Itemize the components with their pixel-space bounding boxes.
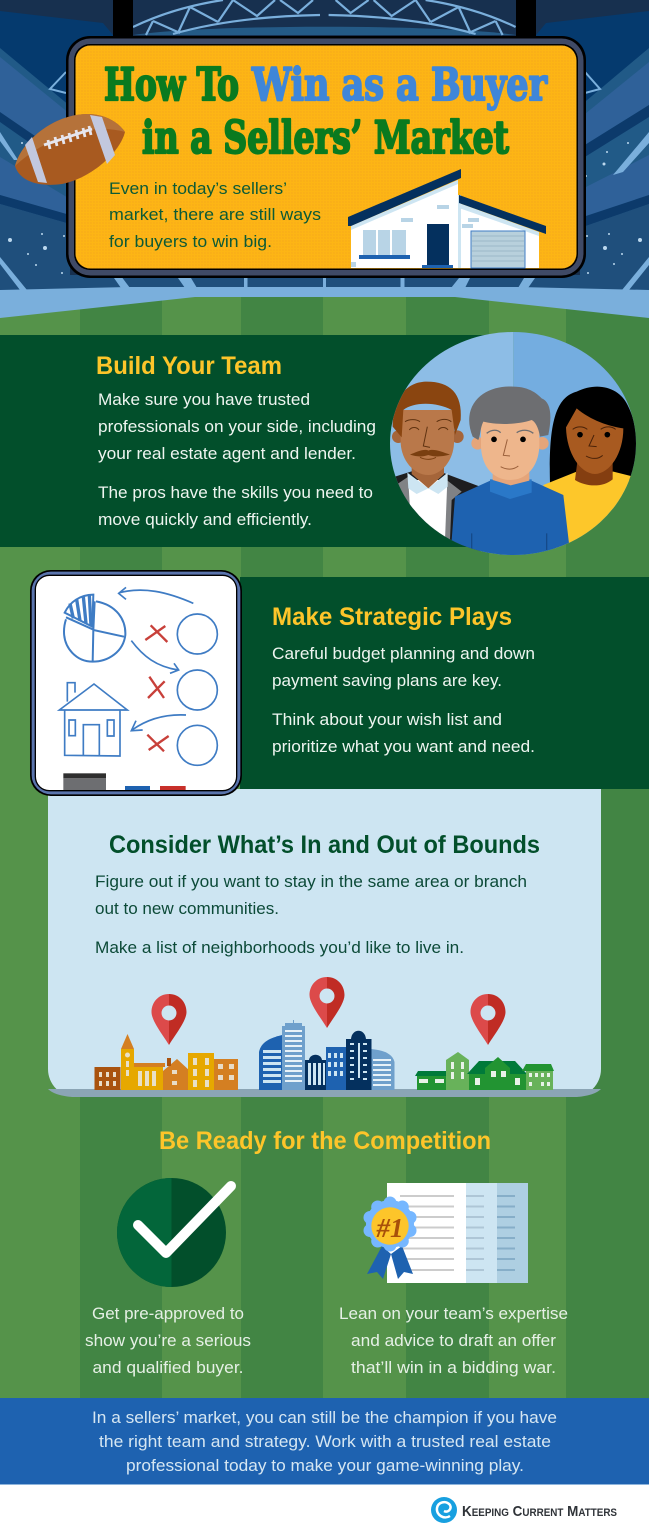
text: build your team: your real estate agent and lender. — [98, 444, 356, 463]
heading: be ready for the competition: Be Ready for the Competition — [159, 1127, 491, 1155]
text: make strategic plays: prioritize what you want and need. — [272, 737, 535, 756]
text: consider — [95, 872, 527, 957]
icon: map pin center — [310, 977, 344, 1028]
text: make strategic plays: payment saving plans are key. — [272, 671, 502, 690]
icon: house — [348, 169, 546, 268]
logo: swirl — [431, 1497, 457, 1523]
eraser and markers — [63, 773, 186, 790]
banner: closing message: the right team and strategy. Work with a trusted real estate — [99, 1432, 551, 1451]
heading: build your team: Build Your Team — [96, 352, 282, 380]
text: pre-approved — [85, 1304, 251, 1377]
illustration: team portraits — [383, 327, 640, 560]
title: in a Sellers’ Market — [142, 111, 509, 164]
icon: document with ribbon — [364, 1183, 528, 1283]
banner: closing message: In a sellers’ market, you can still be the champion if you have — [92, 1408, 557, 1427]
text: make strategic plays — [272, 644, 535, 756]
x marks — [145, 625, 169, 751]
text: build your team: Make sure you have trusted — [98, 390, 310, 409]
stars — [8, 142, 642, 274]
intro text: market, there are still ways — [109, 205, 321, 224]
text: pre-approved: show you’re a serious — [85, 1331, 251, 1350]
heading: make strategic plays: Make Strategic Plays — [272, 603, 512, 631]
person: woman — [543, 387, 636, 560]
text: build your team — [98, 390, 376, 529]
banner: closing message — [0, 1398, 649, 1485]
banner: closing message: professional today to make your game-winning play. — [126, 1456, 524, 1475]
pie chart sketch — [64, 595, 125, 662]
truss arches — [133, 0, 516, 35]
person: man with moustache — [392, 382, 480, 560]
illustration: suburb — [415, 1052, 554, 1090]
panel: consider in and out of bounds — [48, 789, 601, 1097]
text: make strategic plays: Careful budget planning and down — [272, 644, 535, 663]
intro text: Even in today’s sellers’ — [109, 179, 287, 198]
text: make strategic plays: Think about your wish list and — [272, 710, 502, 729]
text: consider: Make a list of neighborhoods you’d like to live in. — [95, 938, 464, 957]
play arrows — [119, 587, 193, 731]
person: gray-haired man — [450, 386, 573, 560]
stadium backdrop — [0, 0, 649, 292]
house sketch — [59, 683, 127, 756]
text: consider: out to new communities. — [95, 899, 279, 918]
text: draft an offer: and advice to draft an offer — [351, 1331, 556, 1350]
field edge: light blue wall — [0, 287, 649, 318]
text: draft an offer: Lean on your team’s expertise — [339, 1304, 568, 1323]
icon: check mark — [117, 1178, 231, 1287]
icon: map pin left — [152, 994, 186, 1045]
icon: football — [15, 114, 125, 185]
whiteboard — [30, 570, 242, 796]
text: draft an offer — [339, 1304, 568, 1377]
under-sign bar — [60, 275, 590, 289]
right stands — [536, 11, 649, 292]
text: consider: Figure out if you want to stay in the same area or branch — [95, 872, 527, 891]
text: build your team: professionals on your side, including — [98, 417, 376, 436]
circles — [177, 614, 217, 765]
icon: map pin right — [470, 994, 506, 1045]
text: build your team: move quickly and efficiently. — [98, 510, 312, 529]
intro text: for buyers to win big. — [109, 232, 272, 251]
intro text — [109, 179, 321, 251]
title: How To — [104, 58, 239, 111]
panel: make strategic plays — [240, 577, 649, 789]
text: draft an offer: that’ll win in a bidding war. — [351, 1358, 556, 1377]
illustration: small town — [94, 1034, 238, 1090]
text: build your team: The pros have the skills you need to — [98, 483, 373, 502]
sign support posts — [113, 0, 536, 42]
title: Win as a Buyer — [251, 58, 548, 111]
text: pre-approved: Get pre-approved to — [92, 1304, 244, 1323]
title — [104, 58, 548, 164]
logo: wordmark: Keeping Current Matters — [462, 1503, 617, 1520]
background: football field stripes — [0, 290, 649, 1400]
panel: build your team — [0, 335, 485, 547]
illustration: city — [259, 1020, 394, 1090]
heading: consider: Consider What’s In and Out of Bounds — [109, 831, 540, 859]
footer — [0, 1485, 649, 1536]
side truss triangles — [50, 72, 600, 93]
badge number: #1 — [376, 1213, 404, 1243]
scoreboard sign — [66, 36, 586, 278]
left stands — [0, 11, 113, 292]
text: pre-approved: and qualified buyer. — [92, 1358, 244, 1377]
